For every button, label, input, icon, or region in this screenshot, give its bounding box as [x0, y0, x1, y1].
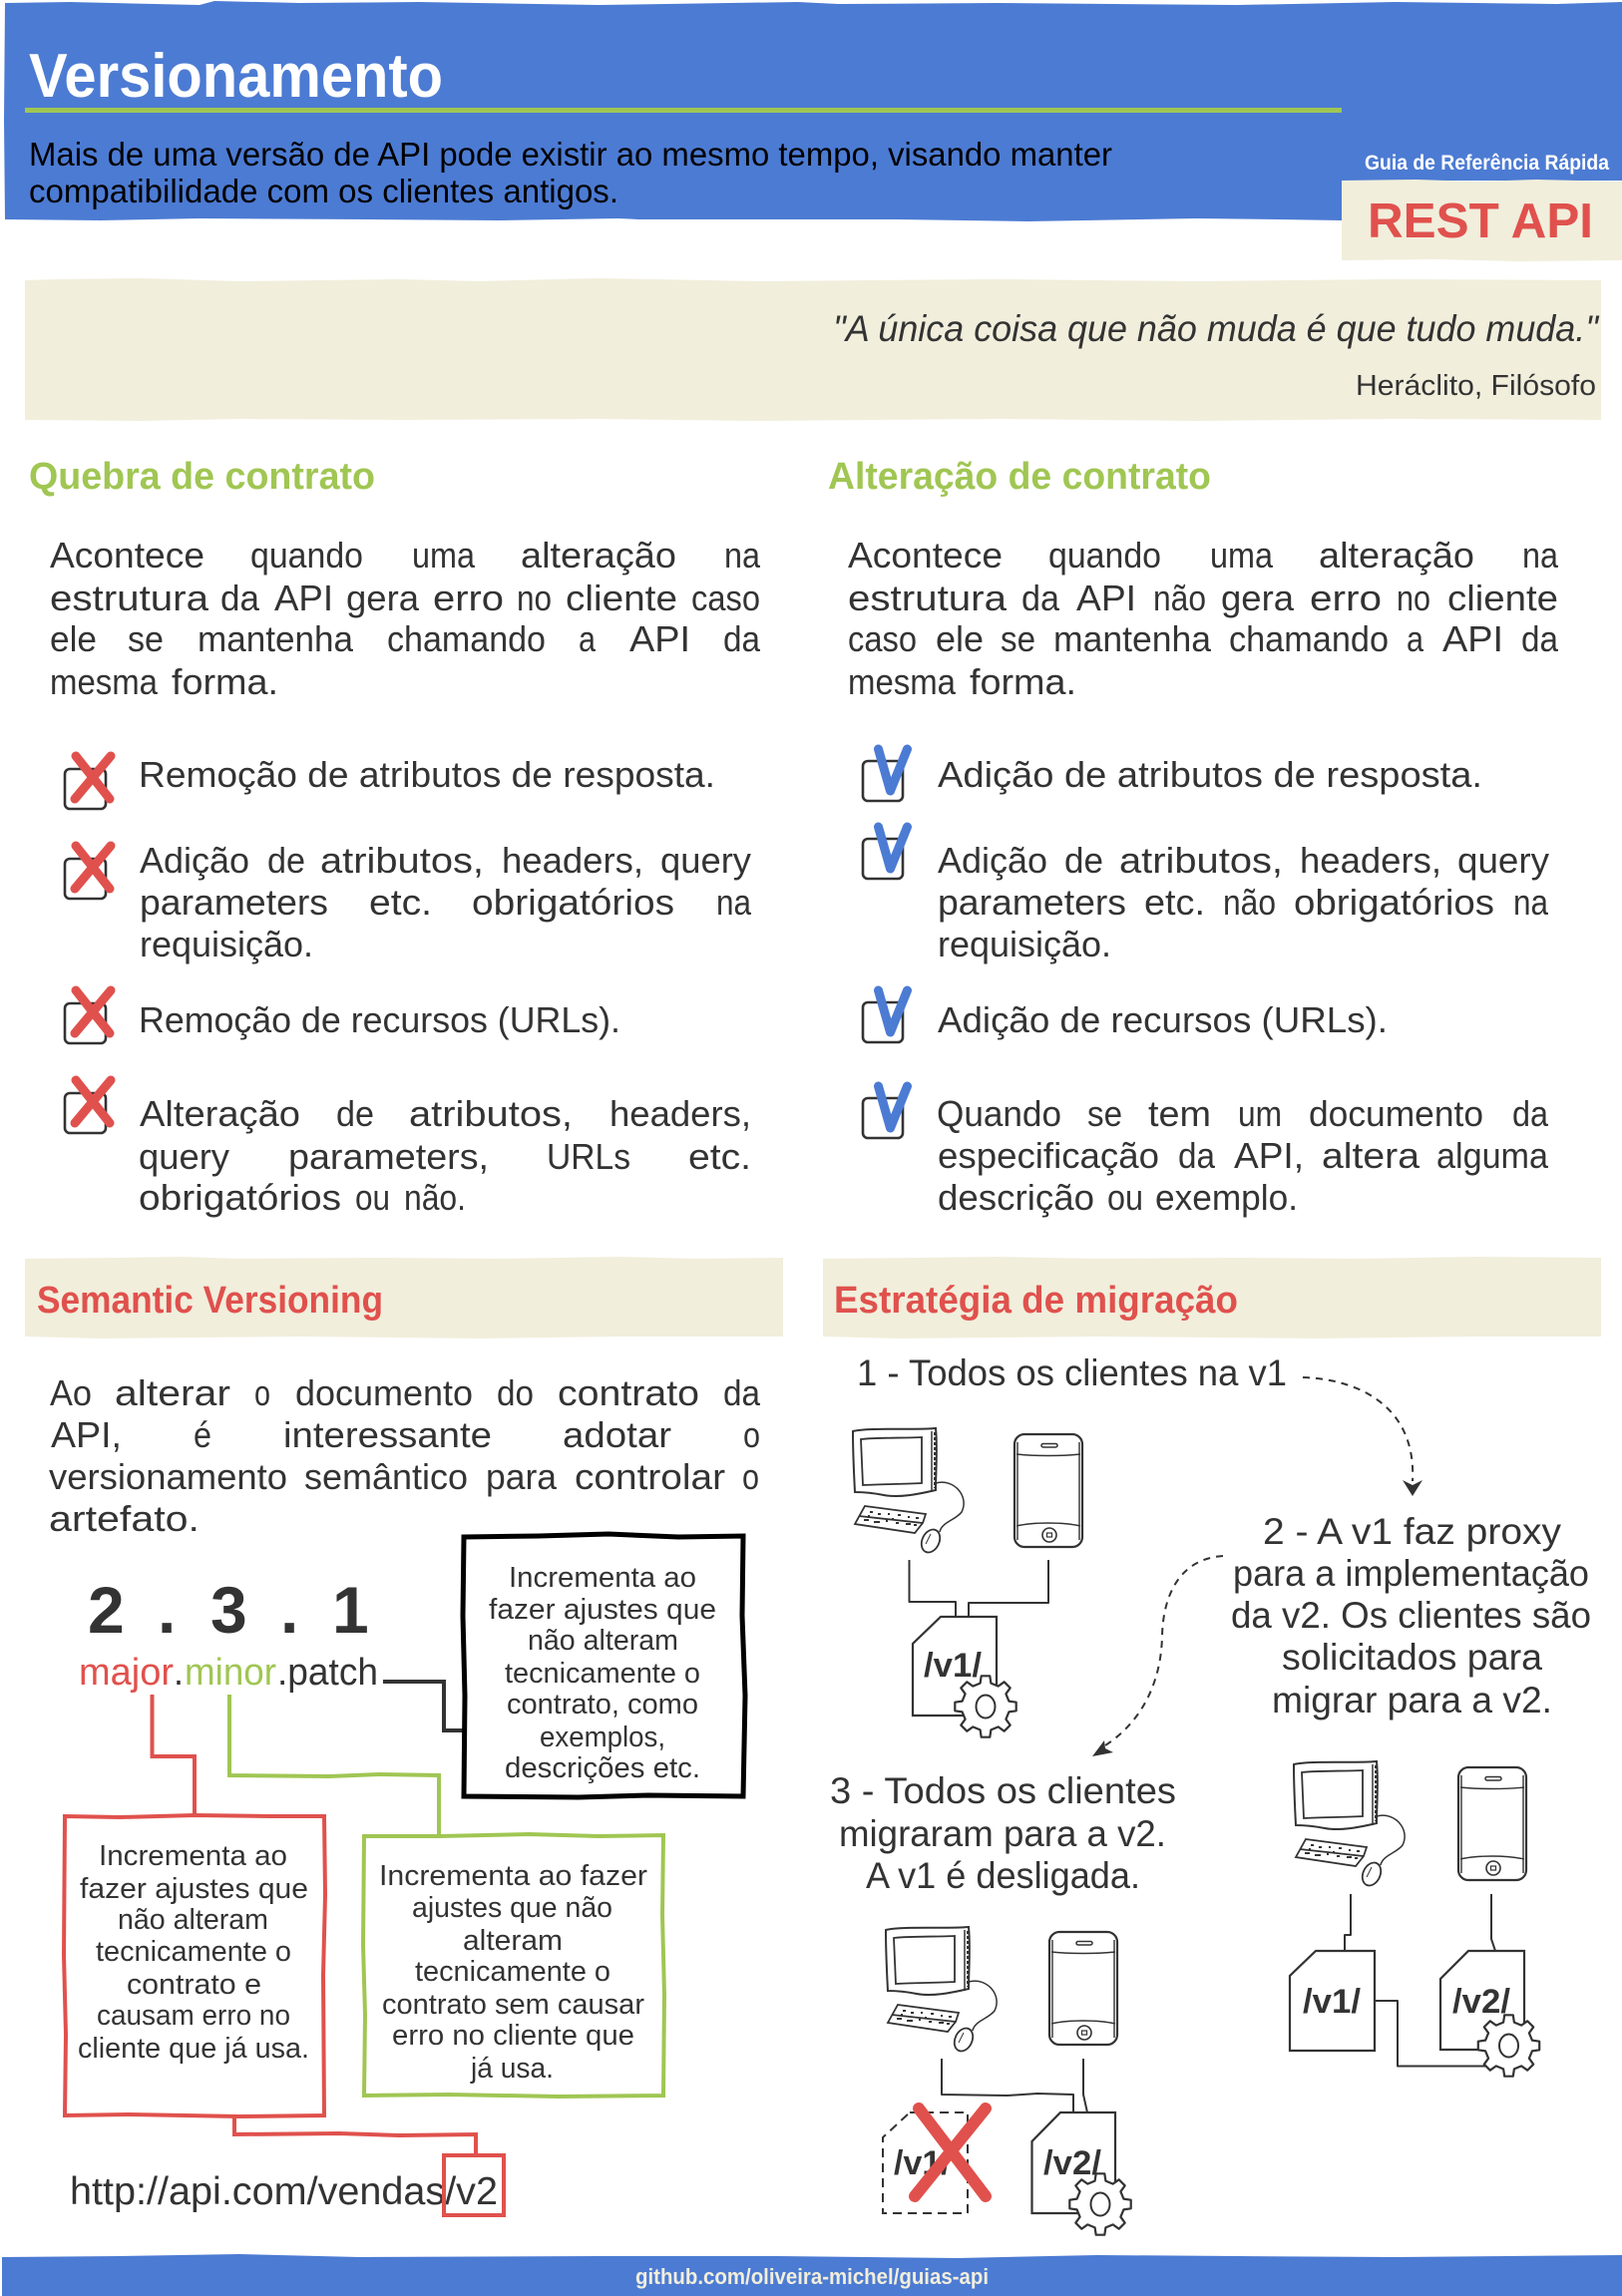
heading bar: Semantic Versioning	[25, 1257, 783, 1339]
text: alteração de contrato description: da	[1021, 577, 1060, 618]
text: alteração de contrato description: gera	[1221, 577, 1295, 618]
callout: minor: alteram	[463, 1925, 563, 1957]
connector: box to url version	[234, 2115, 476, 2155]
icon: phone	[1049, 1932, 1117, 2045]
callout: patch: Incrementa ao	[509, 1562, 696, 1594]
text: alteração de contrato description: a	[1407, 618, 1424, 659]
item: alteração de atributos: obrigatórios	[139, 1177, 341, 1218]
text: alteração de contrato description: não	[1153, 577, 1206, 618]
step 2 text: solicitados para	[1282, 1637, 1542, 1678]
text: alteração de contrato description: mantenha	[1053, 618, 1212, 659]
item: alteração de atributos	[139, 1093, 751, 1218]
subtitle: compatibilidade com os clientes antigos.	[29, 173, 618, 209]
big red cross	[915, 2108, 986, 2196]
text: alteração de contrato description: forma.	[970, 661, 1076, 702]
item: adição não obrigatórios: parameters	[938, 882, 1126, 923]
text: quebra de contrato description: mesma	[50, 661, 159, 702]
text: quebra de contrato description: mantenha	[198, 618, 354, 659]
callout: minor	[363, 1834, 664, 2097]
step 3 text: A v1 é desligada.	[866, 1855, 1140, 1896]
item: alteração de atributos: atributos,	[409, 1093, 573, 1134]
subtitle	[29, 136, 1112, 209]
url version highlight	[444, 2155, 504, 2215]
text: alteração de contrato description: chamando	[1229, 618, 1389, 659]
icon: computer	[853, 1428, 964, 1555]
item: documento de especificação: descrição	[938, 1177, 1094, 1218]
step 3 text	[830, 1770, 1176, 1896]
footer band	[2, 2254, 1622, 2296]
text: quebra de contrato description: caso	[691, 577, 760, 618]
icon: crossed checkbox 3	[65, 990, 111, 1043]
text: semantic versioning description: controlar	[575, 1456, 725, 1497]
footer band: github.com/oliveira-michel/guias-api	[635, 2264, 989, 2289]
label v1: /v1/	[1303, 1983, 1362, 2021]
document v1	[913, 1617, 997, 1716]
connector: major to box	[152, 1695, 195, 1816]
item: alteração de atributos: parameters,	[288, 1136, 489, 1177]
text: quebra de contrato description: ele	[50, 618, 97, 659]
text: semantic versioning description: contrato	[558, 1372, 699, 1413]
panel: quote: "A única coisa que não muda é que tudo muda."	[833, 308, 1600, 349]
heading: Quebra de contrato: Quebra de contrato	[29, 456, 375, 498]
item: alteração de atributos: Alteração	[140, 1093, 300, 1134]
text: semantic versioning description: API,	[51, 1414, 122, 1455]
callout: minor: tecnicamente o	[415, 1956, 610, 1988]
item: alteração de atributos: URLs	[547, 1136, 630, 1177]
text: alteração de contrato description	[848, 535, 1559, 702]
panel: quote: Heráclito, Filósofo	[1356, 370, 1596, 402]
badge: REST API: REST API	[1368, 194, 1593, 248]
connectors	[1345, 1894, 1495, 2067]
text: alteração de contrato description: se	[1001, 618, 1035, 659]
text: alteração de contrato description: Acontece	[848, 535, 1003, 575]
label v2: /v2/	[1452, 1983, 1511, 2021]
icon: phone	[1458, 1767, 1526, 1880]
text: semantic versioning description: o	[743, 1414, 760, 1455]
text: semantic versioning description: Ao	[50, 1372, 92, 1413]
item: documento de especificação: tem	[1148, 1093, 1211, 1134]
item: adição não obrigatórios: Adição	[938, 840, 1047, 881]
diagram: version number	[79, 1573, 378, 1694]
step 2 text: da v2. Os clientes são	[1231, 1595, 1591, 1636]
arrow: step 2 to step 3	[1092, 1556, 1223, 1756]
connectors	[942, 2059, 1087, 2112]
text: quebra de contrato description: uma	[412, 535, 476, 575]
text: alteração de contrato description: caso	[848, 618, 917, 659]
version digits: .	[158, 1573, 176, 1647]
item: documento de especificação: alguma	[1436, 1135, 1549, 1176]
arrow: step 1 to step 2	[1303, 1377, 1422, 1496]
icon: computer	[886, 1927, 997, 2054]
document v1	[1290, 1951, 1375, 2051]
text: semantic versioning description: alterar	[115, 1372, 230, 1413]
text: alteração de contrato description: mesma	[848, 661, 957, 702]
text: semantic versioning description: semântico	[304, 1456, 468, 1497]
text: semantic versioning description: documento	[295, 1372, 473, 1413]
callout: major: fazer ajustes que	[80, 1873, 308, 1905]
label v2: /v2/	[1043, 2144, 1102, 2182]
icon: crossed checkbox 1	[65, 756, 111, 809]
item: documento de especificação: um	[1238, 1093, 1282, 1134]
version digits: 2	[88, 1573, 125, 1647]
text: alteração de contrato description: uma	[1210, 535, 1274, 575]
connector: minor to box	[229, 1695, 439, 1835]
text: alteração de contrato description: erro	[1310, 577, 1382, 618]
callout: patch: contrato, como	[507, 1689, 698, 1721]
item: documento de especificação: exemplo.	[1155, 1177, 1298, 1218]
icon: gear	[1069, 2173, 1131, 2235]
step 2 text	[1231, 1511, 1591, 1721]
item: adição obrigatórios: na	[716, 882, 752, 923]
list: breaking changes	[65, 754, 752, 1218]
step 2 text: migrar para a v2.	[1272, 1680, 1552, 1721]
text: quebra de contrato description: estrutura	[50, 577, 209, 618]
callout: patch: não alteram	[528, 1625, 678, 1657]
text: quebra de contrato description: na	[724, 535, 761, 575]
version labels: minor	[185, 1652, 276, 1694]
item: adição não obrigatórios: query	[1457, 840, 1549, 881]
document v2	[1031, 2112, 1115, 2213]
item: adição obrigatórios: query	[660, 840, 751, 881]
item: adição obrigatórios	[140, 840, 752, 964]
item: documento de especificação: altera	[1322, 1135, 1420, 1176]
item: adição obrigatórios: parameters	[140, 882, 328, 923]
text: alteração de contrato description: da	[1521, 618, 1559, 659]
text: quebra de contrato description: API	[274, 577, 333, 618]
icon: checked box 1	[863, 749, 908, 801]
version labels	[79, 1652, 378, 1694]
callout: minor: Incrementa ao fazer	[379, 1860, 647, 1892]
item: documento de especificação: API,	[1234, 1135, 1304, 1176]
item: adição obrigatórios: etc.	[369, 882, 432, 923]
item: adição não obrigatórios: atributos,	[1119, 840, 1283, 881]
item: documento de especificação: Quando	[937, 1093, 1061, 1134]
step 2 text: 2 - A v1 faz proxy	[1263, 1511, 1562, 1552]
item: adição obrigatórios: atributos,	[320, 840, 484, 881]
item: adição não obrigatórios: headers,	[1300, 840, 1441, 881]
icon: gear	[955, 1676, 1016, 1737]
icon: gear	[1478, 2015, 1539, 2077]
icon: computer	[1294, 1761, 1405, 1888]
connectors	[910, 1560, 1048, 1617]
scene 2: proxy from v1 to v2	[1290, 1761, 1539, 2077]
heading bar: Estratégia de migração: Estratégia de migração	[834, 1280, 1238, 1322]
callout: minor: erro no cliente que	[392, 2020, 634, 2052]
item: documento de especificação: ou	[1107, 1177, 1143, 1218]
icon: checked box 3	[863, 990, 908, 1042]
scene 3: v1 shut down	[883, 1927, 1131, 2235]
item: alteração de atributos: ou	[355, 1177, 390, 1218]
text: alteração de contrato description: ele	[936, 618, 984, 659]
item: adição não obrigatórios: obrigatórios	[1294, 882, 1494, 923]
item: alteração de atributos: não.	[404, 1177, 466, 1218]
callout: major: não alteram	[118, 1904, 268, 1936]
text: quebra de contrato description: da	[723, 618, 761, 659]
text: semantic versioning description: o	[254, 1372, 270, 1413]
subtitle: Mais de uma versão de API pode existir ao mesmo tempo, visando manter	[29, 136, 1112, 173]
version digits: 1	[332, 1573, 369, 1647]
text: semantic versioning description	[49, 1372, 761, 1539]
text: semantic versioning description: é	[194, 1414, 211, 1455]
version digits	[88, 1573, 369, 1647]
heading: Alteração de contrato: Alteração de contrato	[828, 456, 1211, 498]
version digits: .	[280, 1573, 298, 1647]
text: quebra de contrato description: Acontece	[50, 535, 204, 575]
item: documento de especificação: da	[1512, 1093, 1549, 1134]
item: alteração de atributos: de	[336, 1093, 374, 1134]
step 3 text: migraram para a v2.	[839, 1813, 1166, 1854]
text: alteração de contrato description: alteração	[1319, 535, 1474, 575]
text: alteração de contrato description: API	[1076, 577, 1136, 618]
callout: patch	[463, 1534, 745, 1797]
text: alteração de contrato description: API	[1442, 618, 1503, 659]
text: alteração de contrato description: cliente	[1447, 577, 1558, 618]
icon: phone	[1014, 1434, 1082, 1547]
text: quebra de contrato description: erro	[433, 577, 504, 618]
item: adição obrigatórios: obrigatórios	[472, 882, 674, 923]
label v1: /v1/	[924, 1647, 983, 1685]
callout: major: Incrementa ao	[99, 1840, 287, 1872]
text: quebra de contrato description: gera	[346, 577, 420, 618]
icon: checked box 2	[863, 827, 908, 879]
item: adição não obrigatórios: requisição.	[938, 924, 1111, 964]
text: alteração de contrato description: no	[1397, 577, 1430, 618]
text: semantic versioning description: para	[486, 1456, 558, 1497]
text: quebra de contrato description: no	[517, 577, 552, 618]
text: semantic versioning description: versionamento	[49, 1456, 287, 1497]
version digits: 3	[210, 1573, 247, 1647]
text: quebra de contrato description: da	[220, 577, 260, 618]
version labels: .	[174, 1652, 184, 1694]
version labels: major	[79, 1652, 174, 1694]
text: quebra de contrato description	[50, 535, 761, 702]
item: adição obrigatórios: Adição	[140, 840, 249, 881]
icon: checked box 4	[863, 1086, 908, 1138]
label v1: /v1/	[894, 2144, 951, 2182]
step 1 text: 1 - Todos os clientes na v1	[857, 1352, 1287, 1393]
callout: major	[64, 1815, 325, 2116]
text: semantic versioning description: do	[497, 1372, 534, 1413]
url example	[70, 2155, 504, 2215]
item: documento de especificação: especificação	[938, 1135, 1159, 1176]
item: adição de recursos: Adição de recursos (URLs).	[938, 999, 1388, 1040]
document v2	[1440, 1951, 1524, 2050]
item: adição não obrigatórios	[938, 840, 1549, 964]
step 3 text: 3 - Todos os clientes	[830, 1770, 1176, 1811]
icon: crossed checkbox 4	[65, 1080, 111, 1133]
callout: minor: contrato sem causar	[382, 1989, 644, 2021]
text: alteração de contrato description: estrutura	[848, 577, 1008, 618]
list: non-breaking changes	[863, 749, 1549, 1218]
callout: patch: fazer ajustes que	[489, 1594, 716, 1626]
item: adição não obrigatórios: na	[1513, 882, 1549, 923]
item: adição obrigatórios: de	[267, 840, 305, 881]
text: quebra de contrato description: cliente	[566, 577, 677, 618]
callout: major: causam erro no	[97, 2000, 290, 2032]
text: semantic versioning description: da	[723, 1372, 761, 1413]
item: documento de especificação: documento	[1309, 1093, 1483, 1134]
text: quebra de contrato description: alteração	[521, 535, 676, 575]
heading bar: Estratégia de migração	[823, 1257, 1601, 1339]
text: alteração de contrato description: na	[1522, 535, 1559, 575]
text: quebra de contrato description: API	[629, 618, 690, 659]
item: alteração de atributos: headers,	[609, 1093, 751, 1134]
item: adição não obrigatórios: etc.	[1144, 882, 1205, 923]
text: semantic versioning description: o	[742, 1456, 759, 1497]
version labels: .patch	[277, 1652, 378, 1694]
badge: REST API	[1342, 180, 1622, 261]
callout: minor: ajustes que não	[412, 1892, 612, 1924]
item: adição obrigatórios: requisição.	[140, 924, 313, 964]
item: adição de atributos: Adição de atributos de resposta.	[938, 754, 1482, 795]
text: semantic versioning description: artefato.	[49, 1498, 200, 1539]
heading bar: Semantic Versioning: Semantic Versioning	[37, 1280, 383, 1322]
icon: crossed checkbox 2	[65, 846, 111, 899]
url example: http://api.com/vendas/v2	[70, 2170, 498, 2213]
item: remoção de recursos: Remoção de recursos (URLs).	[139, 999, 620, 1040]
item: alteração de atributos: query	[139, 1136, 229, 1177]
item: documento de especificação	[937, 1093, 1549, 1218]
callout: patch: descrições etc.	[505, 1752, 700, 1784]
text: semantic versioning description: interessante	[283, 1414, 492, 1455]
callout: major: contrato e	[127, 1969, 261, 2001]
callout: patch: tecnicamente o	[505, 1658, 700, 1690]
text: semantic versioning description: adotar	[563, 1414, 671, 1455]
text: quebra de contrato description: forma.	[172, 661, 278, 702]
panel: quote	[25, 278, 1601, 421]
title: Versionamento	[29, 42, 443, 111]
text: alteração de contrato description: quando	[1048, 535, 1161, 575]
document v1 dashed	[883, 2112, 968, 2213]
text: quebra de contrato description: chamando	[387, 618, 546, 659]
title underline	[25, 108, 1342, 113]
scene 1: all clients on v1	[853, 1428, 1082, 1737]
step 2 text: para a implementação	[1233, 1553, 1589, 1594]
text: quebra de contrato description: quando	[250, 535, 363, 575]
item: documento de especificação: se	[1087, 1093, 1122, 1134]
item: remoção de atributos: Remoção de atributos de resposta.	[139, 754, 715, 795]
item: adição não obrigatórios: de	[1064, 840, 1103, 881]
callout: major: tecnicamente o	[96, 1936, 291, 1968]
callout: patch: exemplos,	[540, 1722, 665, 1753]
item: adição não obrigatórios: não	[1223, 882, 1276, 923]
header band	[4, 1, 1622, 221]
item: alteração de atributos: etc.	[688, 1136, 751, 1177]
text: quebra de contrato description: se	[128, 618, 164, 659]
callout: minor: já usa.	[470, 2053, 554, 2085]
item: documento de especificação: da	[1178, 1135, 1216, 1176]
item: adição obrigatórios: headers,	[502, 840, 643, 881]
text: quebra de contrato description: a	[579, 618, 597, 659]
connector: patch to box	[383, 1682, 464, 1730]
callout: major: cliente que já usa.	[78, 2033, 309, 2065]
